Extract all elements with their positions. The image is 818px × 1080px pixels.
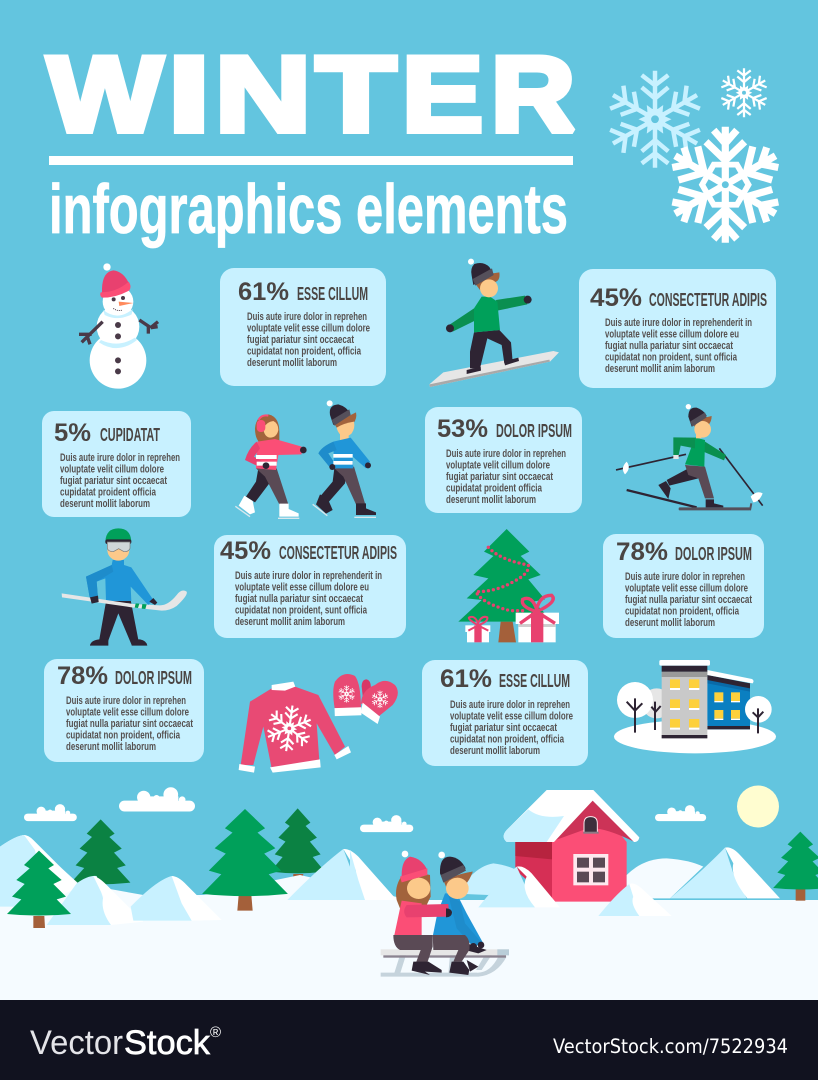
footer logo: VectorStock: Stock: [124, 1024, 211, 1062]
sun: [737, 786, 779, 828]
title: WINTER: R: [491, 34, 575, 154]
house and right mountains: [350, 790, 818, 916]
card: 53% dolor ipsum: [425, 407, 582, 513]
card: 45% consectetur adipis: Duis aute irure dolor in reprehenderit in: [605, 317, 752, 329]
card: 5% cupidatat: fugiat pariatur sint occaecat: [60, 475, 167, 487]
card: 45% consectetur adipis: cupidatat non proident, sunt officia: [605, 352, 738, 364]
card: 45% consectetur adipis lower: fugiat nulla pariatur sint occaecat: [235, 593, 363, 605]
card: 45% consectetur adipis lower: Duis aute irure dolor in reprehenderit in: [235, 570, 382, 582]
card: 45% consectetur adipis: deserunt mollit anim laborum: [605, 363, 715, 375]
card: 61% esse cillum lower: fugiat pariatur sint occaecat: [450, 722, 557, 734]
card: 78% dolor ipsum left: [44, 659, 204, 762]
footer logo: VectorStock: [30, 1024, 221, 1062]
title: WINTER: [48, 34, 575, 154]
skater: girl: [235, 414, 307, 518]
card: 78% dolor ipsum left: DOLOR IPSUM: [115, 667, 192, 688]
card: 45% consectetur adipis: 45%: [590, 284, 642, 312]
card: 53% dolor ipsum: Duis aute irure dolor in reprehen: [446, 448, 566, 460]
card: 78% dolor ipsum left: voluptate velit esse cillum dolore: [66, 706, 189, 718]
card: 78% dolor ipsum right: deserunt mollit laborum: [625, 617, 715, 629]
card: 53% dolor ipsum: 53%: [437, 415, 488, 443]
card: 45% consectetur adipis lower: CONSECTETUR ADIPIS: [279, 542, 397, 563]
title: WINTER: E: [402, 34, 483, 154]
subtitle: infographics elements: [49, 170, 568, 248]
kids on sled: [381, 851, 509, 977]
card: 5% cupidatat: voluptate velit cillum dolore: [60, 464, 164, 476]
card: 5% cupidatat: deserunt mollit laborum: [60, 498, 150, 510]
clouds: [24, 787, 706, 832]
card: 61% esse cillum: cupidatat non proident, officia: [247, 346, 362, 358]
card: 5% cupidatat: [42, 411, 191, 517]
card: 5% cupidatat: CUPIDATAT: [100, 424, 160, 445]
card: 78% dolor ipsum right: fugiat nulla pariatur sint occaecat: [625, 594, 752, 606]
card: 45% consectetur adipis lower: cupidatat non proident, sunt officia: [235, 604, 368, 616]
back hills and snow ground: [0, 900, 818, 1000]
card: 61% esse cillum: voluptate velit esse cillum dolore: [247, 322, 370, 334]
title: WINTER: I: [168, 34, 210, 154]
card: 45% consectetur adipis: fugiat nulla pariatur sint occaecat: [605, 340, 733, 352]
icon: buildings: [614, 660, 776, 753]
card: 78% dolor ipsum left: Duis aute irure dolor in reprehen: [66, 695, 186, 707]
card: 78% dolor ipsum left: 78%: [57, 662, 108, 690]
card: 53% dolor ipsum: deserunt mollit laborum: [446, 494, 536, 506]
boy: [433, 852, 487, 975]
sweater: [239, 682, 351, 773]
icon: ice skaters: [235, 400, 376, 518]
card: 61% esse cillum: 61%: [238, 278, 289, 306]
title: WINTER: W: [48, 34, 162, 154]
icon: snowman: [79, 263, 158, 389]
card: 45% consectetur adipis lower: 45%: [220, 537, 271, 565]
card: 53% dolor ipsum: cupidatat proident officia: [446, 482, 543, 494]
title: WINTER: T: [316, 34, 396, 154]
card: 61% esse cillum: Duis aute irure dolor in reprehen: [247, 311, 367, 323]
card: 78% dolor ipsum right: Duis aute irure dolor in reprehen: [625, 571, 745, 583]
card: 61% esse cillum lower: voluptate velit esse cillum dolore: [450, 710, 573, 722]
left mountains and trees: [0, 808, 410, 930]
card: 78% dolor ipsum left: cupidatat non proident, officia: [66, 730, 181, 742]
footer logo: VectorStock: ®: [210, 1024, 221, 1041]
card: 78% dolor ipsum right: [603, 534, 764, 638]
card: 5% cupidatat: cupidatat proident officia: [60, 486, 157, 498]
card: 78% dolor ipsum left: deserunt mollit laborum: [66, 741, 156, 753]
icon: hockey player: [62, 528, 187, 646]
mittens: [333, 674, 398, 724]
winter landscape: [0, 786, 818, 1000]
card: 78% dolor ipsum right: DOLOR IPSUM: [675, 543, 752, 564]
title underline: [49, 156, 573, 165]
card: 61% esse cillum lower: ESSE CILLUM: [499, 670, 570, 691]
icon: sweater and mittens: [239, 674, 398, 773]
card: 53% dolor ipsum: fugiat pariatur sint occaecat: [446, 471, 553, 483]
card: 45% consectetur adipis: voluptate velit esse cillum dolore eu: [605, 328, 739, 340]
footer band: [0, 1000, 818, 1080]
icon: cross-country skier: [616, 404, 763, 510]
footer logo: VectorStock: Vector: [30, 1024, 123, 1062]
card: 61% esse cillum lower: Duis aute irure dolor in reprehen: [450, 699, 570, 711]
card: 61% esse cillum: ESSE CILLUM: [297, 283, 368, 304]
icon: snowflakes: [606, 68, 785, 243]
card: 61% esse cillum: deserunt mollit laborum: [247, 357, 337, 369]
house: [504, 790, 639, 902]
card: 61% esse cillum lower: [422, 660, 588, 766]
girl: [393, 851, 452, 975]
card: 78% dolor ipsum left: fugiat nulla pariatur sint occaecat: [66, 718, 193, 730]
card: 45% consectetur adipis lower: voluptate velit esse cillum dolore eu: [235, 582, 369, 594]
card: 61% esse cillum: [220, 268, 386, 386]
skater: boy: [313, 400, 376, 517]
card: 61% esse cillum lower: cupidatat non proident, officia: [450, 734, 565, 746]
card: 5% cupidatat: Duis aute irure dolor in reprehen: [60, 452, 180, 464]
footer url: VectorStock.com/7522934: [553, 1035, 788, 1058]
card: 78% dolor ipsum right: 78%: [616, 538, 668, 566]
title: WINTER: N: [215, 34, 311, 154]
card: 61% esse cillum: fugiat pariatur sint occaecat: [247, 334, 354, 346]
card: 45% consectetur adipis: [579, 269, 776, 388]
card: 53% dolor ipsum: DOLOR IPSUM: [496, 420, 572, 441]
card: 78% dolor ipsum right: cupidatat non proident, officia: [625, 606, 740, 618]
icon: christmas tree with gifts: [458, 529, 559, 642]
sled: [381, 949, 509, 977]
card: 53% dolor ipsum: voluptate velit cillum dolore: [446, 460, 550, 472]
card: 61% esse cillum lower: 61%: [440, 665, 492, 693]
card: 5% cupidatat: 5%: [54, 419, 91, 447]
icon: snowboarder: [429, 259, 559, 387]
card: 78% dolor ipsum right: voluptate velit esse cillum dolore: [625, 582, 748, 594]
card: 45% consectetur adipis lower: deserunt mollit anim laborum: [235, 616, 345, 628]
card: 61% esse cillum lower: deserunt mollit laborum: [450, 745, 540, 757]
card: 45% consectetur adipis lower: [214, 535, 406, 638]
